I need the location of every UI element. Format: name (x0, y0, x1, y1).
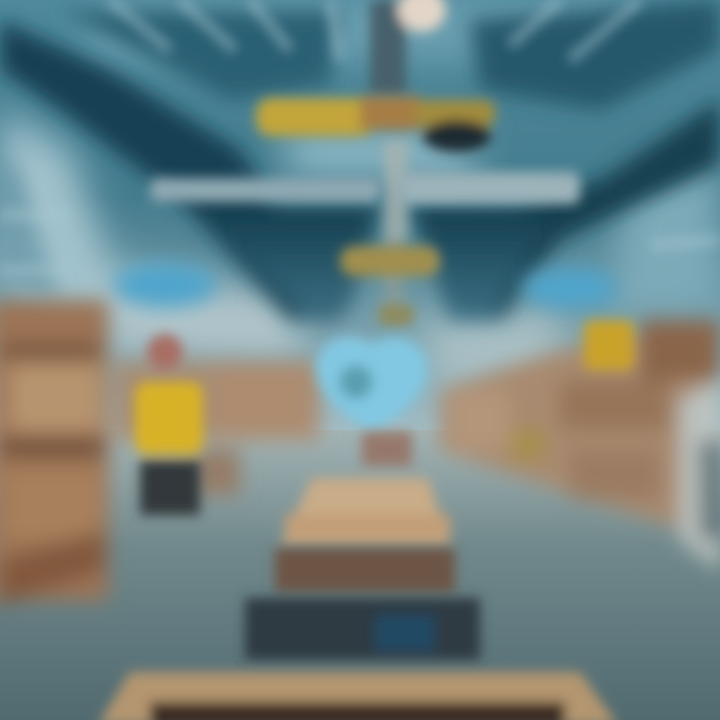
small yellow hanging sign (340, 246, 440, 325)
skylight stripes (0, 0, 720, 270)
centre stack: brown box (275, 548, 455, 592)
left box stacks (0, 300, 320, 605)
blue cloud marks (113, 263, 618, 308)
yellow box on right (584, 320, 634, 370)
warehouse floor (0, 430, 720, 720)
grey horizontal rail (150, 172, 580, 204)
hanging column (370, 0, 446, 320)
right box stacks (440, 320, 720, 570)
small box below shield (362, 432, 412, 466)
blue heart shield (316, 336, 428, 432)
bottom tray (98, 672, 618, 720)
ceiling skylights (0, 0, 720, 390)
centre stack: dark blue box (245, 598, 480, 660)
centre stack: light box (280, 478, 450, 545)
ceiling beams (0, 0, 720, 320)
yellow overhead bar (256, 96, 495, 152)
ceiling background (0, 0, 720, 440)
worker (135, 334, 203, 515)
